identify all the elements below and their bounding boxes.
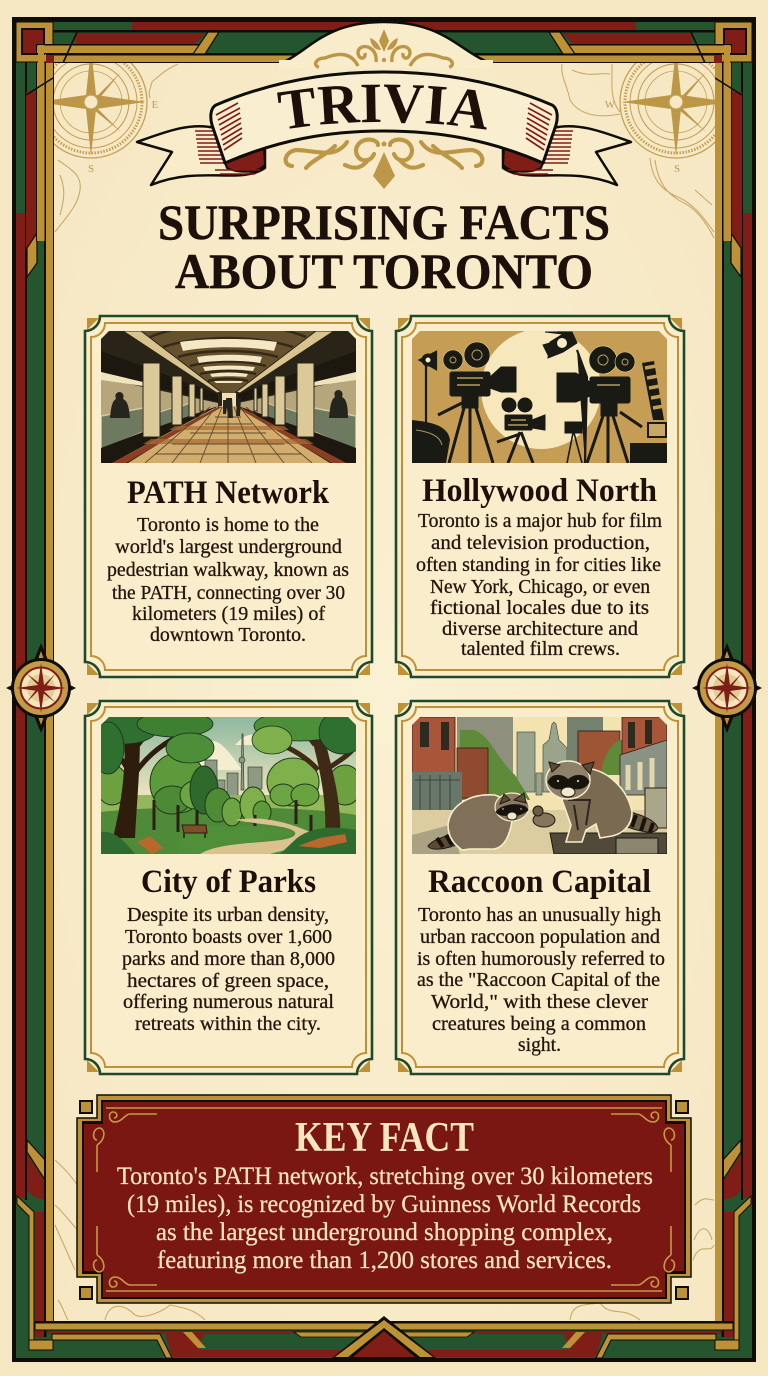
inner gold ornament line [94,1108,674,1291]
side compass: right [692,643,762,733]
text block: Hollywood description: fictional locales due to its [430,597,649,619]
ribbon main band [211,72,557,163]
antique map decoration: S [88,163,94,175]
antique map decoration: S [674,163,680,175]
top arch crest [279,22,493,68]
text block: Parks description: hectares of green space, [127,970,329,992]
icon: fleur ornament [316,29,452,67]
heading [158,194,610,299]
text block: key fact description [117,1161,653,1274]
heading: PATH Network: PATH Network [127,475,330,511]
heading: SURPRISING FACTS [158,194,610,250]
text block: PATH description: world's largest underground [115,536,342,558]
text block: Parks description: offering numerous natural [123,991,334,1013]
text block: PATH description: downtown Toronto. [150,624,306,646]
text block: Raccoon description: as the "Raccoon Capital of the [417,969,660,991]
panel: PATH Network [85,316,372,677]
text block: PATH description: Toronto is home to the [137,514,319,536]
inner parchment panel [54,63,715,1321]
antique map decoration: W [605,99,616,111]
bottom chevron ornament [332,1316,436,1358]
text block: Parks description: Despite its urban density, [127,904,329,926]
illustration: park with skyline [101,717,356,854]
text block: Parks description: Toronto boasts over 1,600 [125,926,332,948]
text block: Hollywood description: Toronto is a major hub for film [418,510,662,532]
antique map decoration: E [152,99,159,111]
text block: Raccoon description: Toronto has an unusually high [418,904,661,926]
heading: KEY FACT: KEY FACT [295,1115,474,1161]
text block: key fact description: as the largest underground shopping complex, [156,1217,613,1246]
text block: PATH description: the PATH, connecting over 30 [112,582,345,604]
text block: PATH description: kilometers (19 miles) of [132,603,325,625]
text block: Parks description: parks and more than 8,000 [122,948,335,970]
text block: Hollywood description: and television production, [431,532,650,554]
text block: Raccoon description: sight. [518,1034,561,1056]
text block: PATH description: pedestrian walkway, known as [107,559,349,581]
text block: PATH description [107,514,349,646]
heading: Raccoon Capital: Raccoon Capital [428,864,651,900]
text block: Hollywood description: diverse architecture and [442,618,638,640]
heading: ABOUT TORONTO [175,243,593,299]
text block: key fact description: Toronto's PATH network, stretching over 30 kilometers [117,1161,653,1190]
ribbon left tail [137,126,265,185]
text block: Raccoon description: is often humorously referred to [417,948,665,970]
text block: Hollywood description: New York, Chicago, or even [430,576,650,598]
text block: Raccoon description: creatures being a common [432,1013,646,1035]
panel: Hollywood North [396,316,684,677]
text block: key fact description: (19 miles), is recognized by Guinness World Records [127,1189,641,1218]
text block: key fact description: featuring more than 1,200 stores and services. [157,1245,612,1274]
panel: City of Parks [85,701,372,1074]
text block: Parks description [122,904,335,1035]
side compass: left [6,643,76,733]
title: TRIVIA: TRIVIA [277,84,487,130]
ornament below banner [286,140,482,189]
text block: Parks description: retreats within the city. [135,1013,321,1035]
ribbon banner with title [136,70,632,186]
heading: Hollywood North: Hollywood North [422,473,657,509]
text block: Raccoon description: World," with these clever [431,991,648,1013]
text block: Hollywood description: talented film crews. [461,638,620,660]
heading: City of Parks: City of Parks [141,864,316,900]
illustration: underground walkway [101,324,356,463]
ribbon right tail [503,126,631,185]
panel: Raccoon Capital [396,701,684,1074]
ribbon folds [195,131,573,174]
corner squares [80,1101,688,1299]
text block: Hollywood description [416,510,662,660]
text block: Hollywood description: often standing in for cities like [416,554,661,576]
panel: key fact [77,1095,691,1303]
text block: Raccoon description: urban raccoon population and [420,926,660,948]
illustration: film cameras [412,329,667,463]
illustration: raccoons in the city [412,717,667,854]
text block: Raccoon description [417,904,665,1056]
